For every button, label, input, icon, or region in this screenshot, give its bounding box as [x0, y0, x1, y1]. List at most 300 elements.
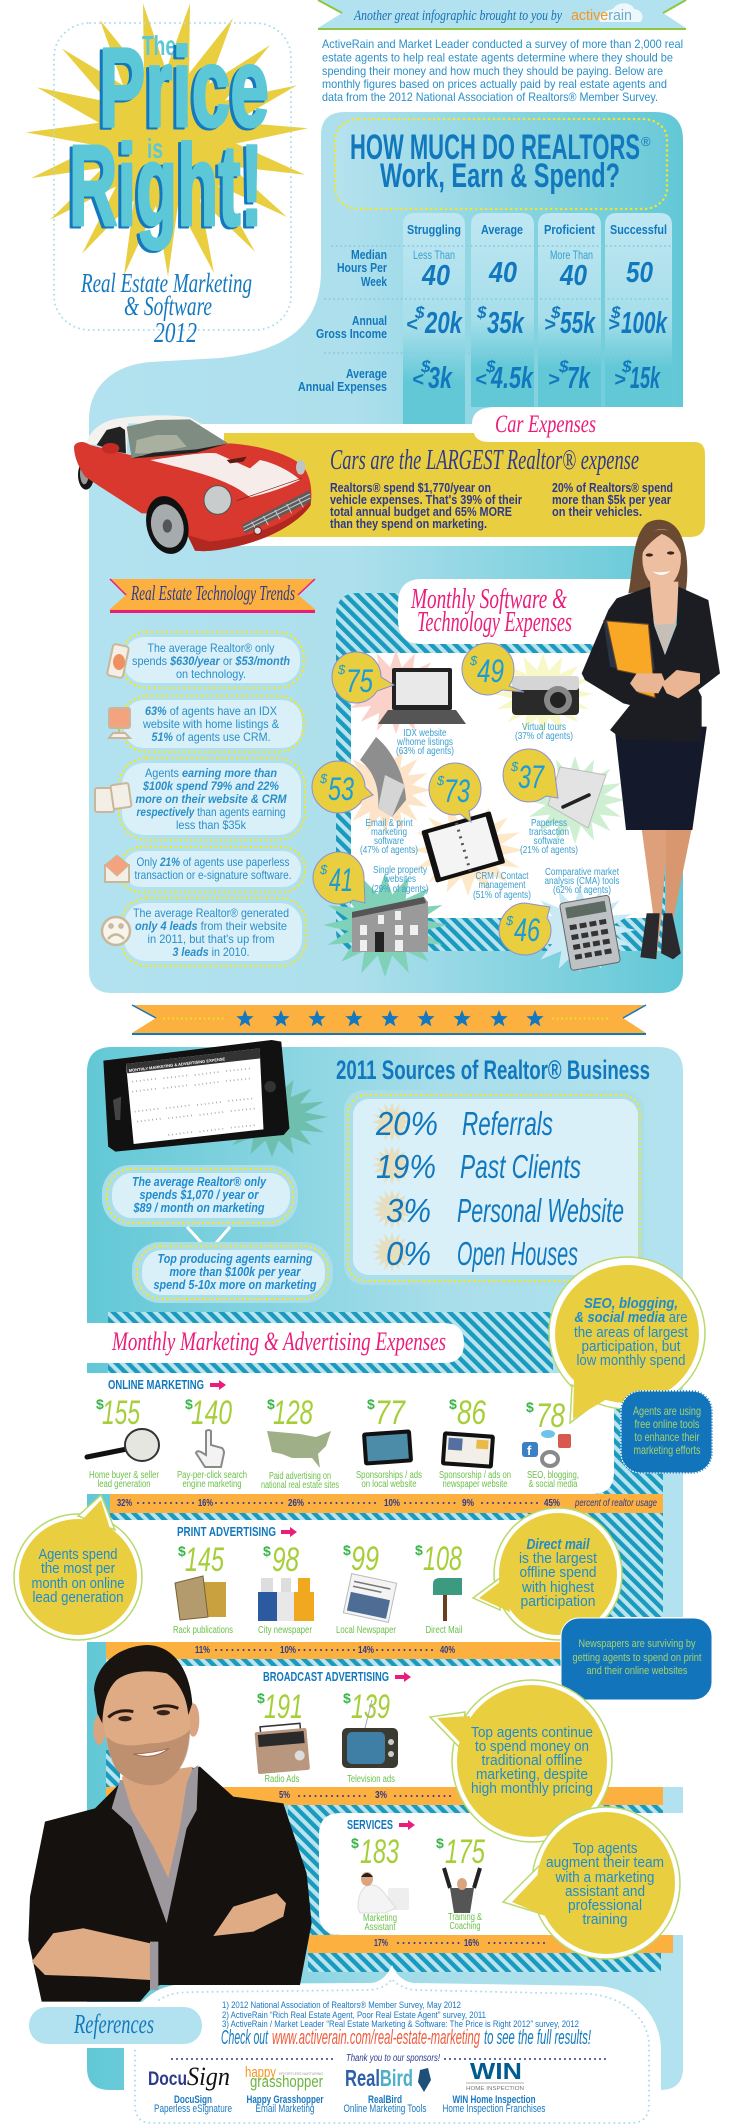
services prices: [351, 1833, 485, 1871]
price bubble: 75: $: [337, 662, 346, 677]
callout: traditional offline marketing bubble: marketing, despite: [476, 1766, 588, 1783]
broadcast prices: $: [343, 1690, 351, 1706]
print prices: $: [415, 1542, 423, 1558]
icon: organizer: [421, 811, 505, 883]
sources list box: 3%: [386, 1192, 431, 1229]
callout: SEO blogging bubble: low monthly spend: [576, 1352, 686, 1369]
software labels: (63% of agents): [396, 746, 454, 757]
software labels: CRM / Contact: [476, 871, 529, 882]
logo: DocuSign: Sign: [187, 2062, 230, 2091]
online prices: $: [449, 1396, 457, 1412]
right text: 20% of Realtors® spend: [552, 480, 673, 495]
usage bar: print: 40%: [440, 1645, 455, 1656]
callout: direct mail bubble: offline spend: [520, 1564, 596, 1581]
online captions: & social media: [528, 1479, 578, 1490]
callout: traditional offline marketing bubble: traditional offline: [482, 1752, 582, 1769]
icon: newspapers: [343, 1574, 397, 1622]
column headers: Average: [481, 222, 523, 237]
callout: traditional offline marketing bubble: to spend money on: [475, 1738, 589, 1755]
price bubble: 49: 49: [477, 653, 504, 689]
callout: average realtor: $89 / month on marketing: [133, 1201, 265, 1215]
panel: references: [29, 1965, 661, 2126]
callout: online lead generation bubble: month on online: [32, 1575, 124, 1592]
software labels: (29% of agents): [372, 884, 428, 895]
left text: [330, 480, 522, 531]
yellow banner: [224, 433, 705, 537]
row: hours: 40: [488, 257, 517, 289]
row: expenses: <: [412, 369, 424, 391]
icon: cloud: [599, 3, 642, 22]
software labels: Virtual tours: [522, 722, 566, 733]
panel: car expenses: [74, 407, 705, 558]
icon: radio: [254, 1723, 310, 1774]
tab heading: Technology Expenses: [417, 607, 572, 638]
tip 3: more on their website & CRM: [136, 792, 287, 806]
arrow: [281, 1527, 297, 1537]
icon: hand cursor: [196, 1430, 224, 1467]
subtitle: Real Estate Marketing: [80, 268, 252, 298]
print prices: 108: [423, 1540, 462, 1578]
print prices: [178, 1540, 462, 1579]
intro paragraph: data from the 2012 National Association of Realtors® Member Survey.: [322, 90, 658, 104]
broadcast prices: [257, 1688, 390, 1726]
services prices: $: [351, 1835, 359, 1851]
callout: newspapers surviving: and their online websites: [586, 1665, 688, 1677]
row: expenses: 3k: [428, 360, 453, 395]
price bubble: 49: [462, 643, 524, 695]
icon: book: [95, 783, 132, 812]
icon: marketing assistant: [358, 1872, 409, 1913]
call to action: www.activerain.com/real-estate-marketing: [272, 2027, 480, 2049]
column headers: Successful: [610, 222, 667, 237]
price bubble: 41: [313, 852, 365, 904]
broadcast captions: Television ads: [347, 1774, 395, 1785]
online prices: $: [96, 1396, 104, 1412]
broadcast captions: Radio Ads: [264, 1774, 300, 1785]
call to action: to see the full results!: [484, 2027, 591, 2049]
callout: online lead generation bubble: Agents spend: [38, 1546, 118, 1563]
sources list box: 20%: [375, 1105, 438, 1142]
row labels: Annual: [352, 314, 387, 328]
tip 5: in 2011, but that's up from: [148, 932, 275, 946]
icon: envelope: [105, 855, 129, 882]
usage bar: online: 45%: [544, 1498, 560, 1509]
row labels: Gross Income: [316, 327, 387, 341]
heading box: Work, Earn & Spend?: [380, 157, 620, 195]
icon: email fan: [360, 737, 406, 817]
print captions: Rack publications: [173, 1625, 233, 1636]
tip 5: 3 leads in 2010.: [172, 945, 250, 959]
sources list box: 19%: [376, 1148, 436, 1185]
print prices: $: [343, 1542, 351, 1558]
price bubble: 53: 53: [328, 771, 354, 807]
tip 4: transaction or e-signature software.: [134, 868, 292, 882]
column headers: Struggling: [407, 222, 461, 237]
subtitle: & Software: [124, 291, 212, 321]
online prices: 78: [536, 1397, 565, 1435]
subheading: ONLINE MARKETING: [108, 1377, 204, 1392]
services captions: Marketing: [363, 1913, 397, 1924]
online captions: Pay-per-click search: [177, 1470, 247, 1481]
white panel: [87, 1965, 661, 2126]
print captions: Direct Mail: [426, 1625, 462, 1636]
intro paragraph: spending their money and how much they should be paying. Below are: [322, 64, 663, 78]
usage bar: online: [110, 1494, 663, 1513]
software labels: Comparative market: [545, 867, 619, 878]
logo: WIN Home Inspection: [466, 2058, 524, 2092]
row labels: Week: [361, 275, 387, 289]
online prices: $: [267, 1396, 275, 1412]
software labels: Single property: [373, 865, 427, 876]
tip 3: respectively than agents earning: [136, 805, 286, 819]
photo: businessman: [28, 1645, 312, 2002]
online prices: $: [526, 1399, 534, 1415]
print prices: $: [178, 1543, 186, 1559]
photo: businesswoman: [582, 520, 720, 959]
tip 4: Only 21% of agents use paperless: [136, 855, 290, 869]
usage bar: print: 14%: [358, 1645, 374, 1656]
row: expenses: 15k: [630, 360, 661, 395]
callout: augment team bubble: [503, 1807, 680, 1959]
tab heading: Monthly Software &: [410, 584, 567, 615]
ribbon heading: [110, 579, 315, 613]
panel: how much do realtors table: [298, 119, 672, 424]
star ribbon divider: [132, 1005, 646, 1035]
tab heading: Monthly Marketing & Advertising Expenses: [111, 1327, 446, 1356]
row: expenses: 7k: [567, 360, 591, 395]
row: income: <: [406, 314, 418, 336]
icon: magnifying glass: [87, 1429, 159, 1461]
logo: WIN Home Inspection: HOME INSPECTION: [466, 2086, 524, 2092]
icon: referee: [444, 1868, 480, 1913]
reference list: 2) ActiveRain “Rich Real Estate Agent, Poor Real Estate Agent” survey, 2011: [222, 2010, 486, 2021]
panel: realtor overview background: [89, 112, 683, 993]
row: hours: 40: [559, 260, 587, 292]
row: expenses: [412, 357, 661, 395]
software labels: marketing: [371, 827, 407, 838]
background bursts: [323, 650, 636, 977]
callout: online lead generation bubble: lead generation: [32, 1589, 124, 1606]
callout: online lead generation bubble: [14, 1495, 142, 1640]
tip 3: [119, 758, 305, 840]
row: income: 35k: [487, 305, 525, 340]
subheading: PRINT ADVERTISING: [177, 1524, 276, 1539]
usage bar: online: 16%: [198, 1498, 213, 1509]
intro paragraph: [322, 37, 683, 104]
price bubble: 46: $: [505, 913, 514, 928]
software labels: (51% of agents): [473, 890, 531, 901]
software labels: management: [478, 880, 526, 891]
software labels: IDX website: [404, 728, 447, 739]
panel: monthly marketing and advertising expenses: [0, 1312, 700, 1972]
price bubble: 49: $: [469, 653, 478, 668]
right text: [552, 480, 673, 519]
price bubble: 73: [429, 763, 481, 822]
left text: Realtors® spend $1,770/year on: [330, 480, 491, 495]
arrow: [395, 1672, 411, 1682]
title words: Price: [99, 25, 269, 150]
arrow: callout connector: [187, 1227, 230, 1251]
tab heading: [87, 1323, 464, 1363]
row: income: >: [544, 314, 556, 336]
sponsor captions: RealBird: [368, 2094, 402, 2106]
online captions: [89, 1470, 579, 1491]
services captions: Coaching: [450, 1921, 480, 1932]
online captions: national real estate sites: [261, 1480, 339, 1491]
price bubble: 37: [503, 749, 558, 802]
callout: traditional offline marketing bubble: high monthly pricing: [471, 1780, 593, 1797]
callout: SEO blogging bubble: participation, but: [582, 1338, 681, 1355]
sponsor captions: Paperless eSignature: [154, 2103, 232, 2115]
software labels: Email & print: [366, 818, 413, 829]
column headers: Proficient: [544, 222, 596, 237]
sponsor captions: Email Marketing: [256, 2103, 314, 2115]
software labels: transaction: [529, 827, 569, 838]
left text: vehicle expenses. That's 39% of their: [330, 492, 522, 507]
online captions: on local website: [362, 1479, 417, 1490]
section: print advertising: [0, 1520, 700, 1666]
callout: SEO blogging bubble: the areas of largest: [574, 1324, 689, 1341]
icon: newspaper boxes: [258, 1578, 314, 1621]
icon: house: [352, 897, 428, 952]
online prices: [96, 1394, 565, 1435]
tip 5: [121, 898, 306, 966]
icon: money: [107, 644, 129, 678]
software labels: analysis (CMA) tools: [544, 876, 620, 887]
callout: direct mail bubble: [473, 1508, 622, 1640]
row labels: [298, 248, 387, 394]
price bubble: 46: [499, 903, 551, 955]
title block: [26, 3, 308, 349]
price bubble: 46: 46: [514, 912, 540, 948]
software labels: [360, 722, 620, 901]
callout: traditional offline marketing bubble: Top agents continue: [471, 1724, 593, 1741]
top ribbon: Another great infographic brought to you by: [353, 8, 562, 24]
panel: sources of realtor business: [102, 1040, 650, 1303]
price bubble: 53: [312, 761, 373, 813]
online prices: $: [367, 1396, 375, 1412]
online captions: Sponsorships / ads: [356, 1470, 422, 1481]
callout: free online tools: [621, 1391, 712, 1473]
row: hours: More Than: [550, 248, 593, 262]
print prices: 145: [185, 1541, 224, 1579]
row: hours: 50: [626, 257, 653, 289]
callout: online lead generation bubble: the most per: [41, 1560, 115, 1577]
row labels: Hours Per: [337, 261, 387, 275]
striped backgrounds: [106, 1312, 663, 1972]
title words: Right!: [69, 122, 263, 250]
sources list box: Open Houses: [457, 1235, 578, 1272]
tip 2: 63% of agents have an IDX: [145, 704, 277, 718]
panel: monthly software and technology expenses: [312, 579, 665, 977]
row: income: $: [610, 303, 621, 322]
top ribbon: activerain: [571, 7, 632, 24]
callout: direct mail bubble: participation: [520, 1593, 596, 1610]
logo: Happy Grasshopper: grasshopper: [250, 2072, 323, 2091]
price bubble: 41: 41: [329, 862, 353, 898]
row: income: $: [550, 303, 561, 322]
references pill: References: [73, 2009, 154, 2039]
broadcast captions: [264, 1774, 395, 1785]
sponsor captions: [154, 2094, 546, 2115]
services captions: Training &: [448, 1912, 482, 1923]
intro paragraph: monthly figures based on prices actually paid by real estate agents and: [322, 77, 667, 91]
logo: Happy Grasshopper: happy: [245, 2064, 276, 2081]
online prices: $: [185, 1396, 193, 1412]
callout: newspapers surviving: getting agents to spend on print: [572, 1652, 702, 1664]
row labels: Annual Expenses: [298, 380, 387, 394]
icon: television: [342, 1700, 398, 1768]
row: expenses: 4.5k: [490, 360, 534, 395]
online captions: Paid advertising on: [269, 1471, 331, 1482]
online prices: 86: [457, 1394, 486, 1432]
sponsor captions: DocuSign: [174, 2094, 212, 2106]
callout: average realtor: The average Realtor® only: [132, 1175, 267, 1189]
row: hours: Less Than: [413, 248, 455, 262]
legs and skirt: [614, 727, 707, 959]
callout: top producing agents: spend 5-10x more on marketing: [154, 1278, 317, 1292]
software labels: w/home listings: [396, 737, 453, 748]
services captions: [363, 1912, 482, 1933]
software labels: (21% of agents): [520, 845, 578, 856]
section: broadcast advertising: [120, 1666, 700, 1787]
callout: augment team bubble: with a marketing: [555, 1869, 654, 1886]
call to action: Check out: [221, 2027, 269, 2049]
sponsor captions: Online Marketing Tools: [344, 2103, 427, 2115]
sources list box: [344, 1090, 644, 1285]
title words: Right!: [66, 124, 260, 252]
callout: newspapers surviving: [561, 1618, 712, 1700]
broadcast prices: 139: [351, 1688, 390, 1726]
software labels: software: [534, 836, 565, 847]
price bubble: 41: $: [319, 862, 328, 877]
left text: total annual budget and 65% MORE: [330, 504, 512, 519]
subheading: BROADCAST ADVERTISING: [263, 1669, 389, 1684]
icon: magazines: [175, 1576, 226, 1620]
logo: DocuSign: [148, 2062, 230, 2091]
online captions: SEO, blogging,: [527, 1470, 579, 1481]
usage bar: online: 32%: [117, 1498, 132, 1509]
references pill: [29, 2007, 202, 2044]
print captions: Local Newspaper: [336, 1625, 397, 1636]
right text: on their vehicles.: [552, 504, 642, 519]
broadcast prices: $: [257, 1690, 265, 1706]
heading box: ®: [641, 134, 651, 149]
usage bar: online: 9%: [462, 1498, 474, 1509]
column backgrounds: [403, 213, 672, 424]
online prices: 77: [375, 1394, 406, 1432]
reference list: 3) ActiveRain / Market Leader “Real Estate Marketing & Software: The Price is Right 2012” survey, 2012: [222, 2019, 579, 2030]
callout: top producing agents: more than $100k per year: [170, 1265, 301, 1279]
services prices: $: [436, 1835, 444, 1851]
logo: DocuSign: Docu: [148, 2069, 187, 2090]
icon: calculator: [559, 895, 621, 971]
sunburst: [26, 3, 308, 277]
icon: red car: [74, 415, 311, 558]
callout: augment team bubble: augment their team: [546, 1854, 664, 1871]
arrow: [210, 1380, 226, 1390]
services captions: Assistant: [364, 1922, 396, 1933]
price bubble: 73: $: [436, 773, 445, 788]
online prices: 128: [273, 1394, 313, 1432]
icon: notepad and pen: [548, 767, 606, 828]
panel: real estate technology trends: [95, 579, 315, 966]
ribbon heading: Real Estate Technology Trends: [130, 581, 295, 605]
subtitle: 2012: [154, 317, 197, 349]
callout: traditional offline marketing bubble: [430, 1680, 612, 1842]
tip 3: Agents earning more than: [145, 766, 277, 780]
row: hours: 40: [421, 260, 450, 292]
dotted frame: [54, 23, 291, 330]
tip 2: 51% of agents use CRM.: [152, 730, 270, 744]
sponsor captions: Happy Grasshopper: [246, 2094, 324, 2106]
usage bar: broadcast: 3%: [375, 1790, 387, 1801]
tip 5: The average Realtor® generated: [133, 906, 289, 920]
callout: free online tools: to enhance their: [634, 1430, 700, 1444]
row: expenses: $: [558, 357, 569, 376]
tab heading: [398, 579, 645, 644]
row: expenses: $: [621, 357, 632, 376]
icon: computer: [109, 708, 130, 738]
price bubble: 37: $: [510, 759, 519, 774]
row labels: Median: [351, 248, 387, 262]
price bubble: 37: 37: [518, 759, 545, 795]
row: expenses: <: [475, 369, 487, 391]
online captions: engine marketing: [182, 1479, 242, 1490]
row: expenses: >: [614, 369, 626, 391]
row: income: >: [608, 314, 620, 336]
right text: more than $5k per year: [552, 492, 671, 507]
subtitle: [80, 268, 252, 349]
callout: direct mail bubble: Direct mail: [526, 1536, 590, 1553]
icon: sad face: [102, 917, 130, 945]
tip 1: The average Realtor® only: [148, 641, 274, 655]
row: income: 20k: [424, 305, 463, 340]
usage bar: broadcast: 5%: [279, 1790, 290, 1801]
row: hours: [413, 248, 653, 292]
sponsors heading: Thank you to our sponsors!: [346, 2053, 440, 2064]
title words: The: [142, 30, 176, 61]
sources list box: Referrals: [462, 1105, 553, 1142]
icon: phone with calendar: MONTHLY MARKETING & ADVERTISING EXPENSE: [129, 1056, 226, 1073]
icon: tablet: [362, 1429, 413, 1466]
callout: augment team bubble: Top agents: [572, 1840, 638, 1857]
tip 1: spends $630/year or $53/month: [132, 654, 290, 668]
reference list: 1) 2012 National Association of Realtors® Member Survey, May 2012: [222, 2000, 461, 2011]
heading box: [335, 119, 667, 209]
row: expenses: $: [420, 357, 431, 376]
callout: newspapers surviving: Newspapers are surviving by: [578, 1638, 696, 1650]
callout: direct mail bubble: with highest: [521, 1579, 595, 1596]
print prices: 98: [272, 1541, 299, 1579]
logo: Happy Grasshopper: [245, 2064, 323, 2091]
icon: phone with calendar: [103, 1040, 328, 1157]
software labels: Paperless: [531, 818, 567, 829]
print captions: [173, 1625, 462, 1636]
price bubble: 75: [332, 652, 394, 703]
icon: social media: [522, 1430, 571, 1468]
tab label: Car Expenses: [495, 411, 596, 438]
sponsor captions: Home Inspection Franchises: [442, 2103, 546, 2115]
callout: free online tools: Agents are using: [633, 1404, 701, 1418]
row: income: [406, 303, 668, 340]
title words: is: [147, 133, 163, 164]
tip 5: only 4 leads from their website: [135, 919, 287, 933]
logo: WIN Home Inspection: WIN: [470, 2058, 522, 2084]
online captions: newspaper website: [442, 1479, 508, 1490]
row: expenses: >: [548, 369, 560, 391]
subheading: SERVICES: [347, 1817, 393, 1832]
